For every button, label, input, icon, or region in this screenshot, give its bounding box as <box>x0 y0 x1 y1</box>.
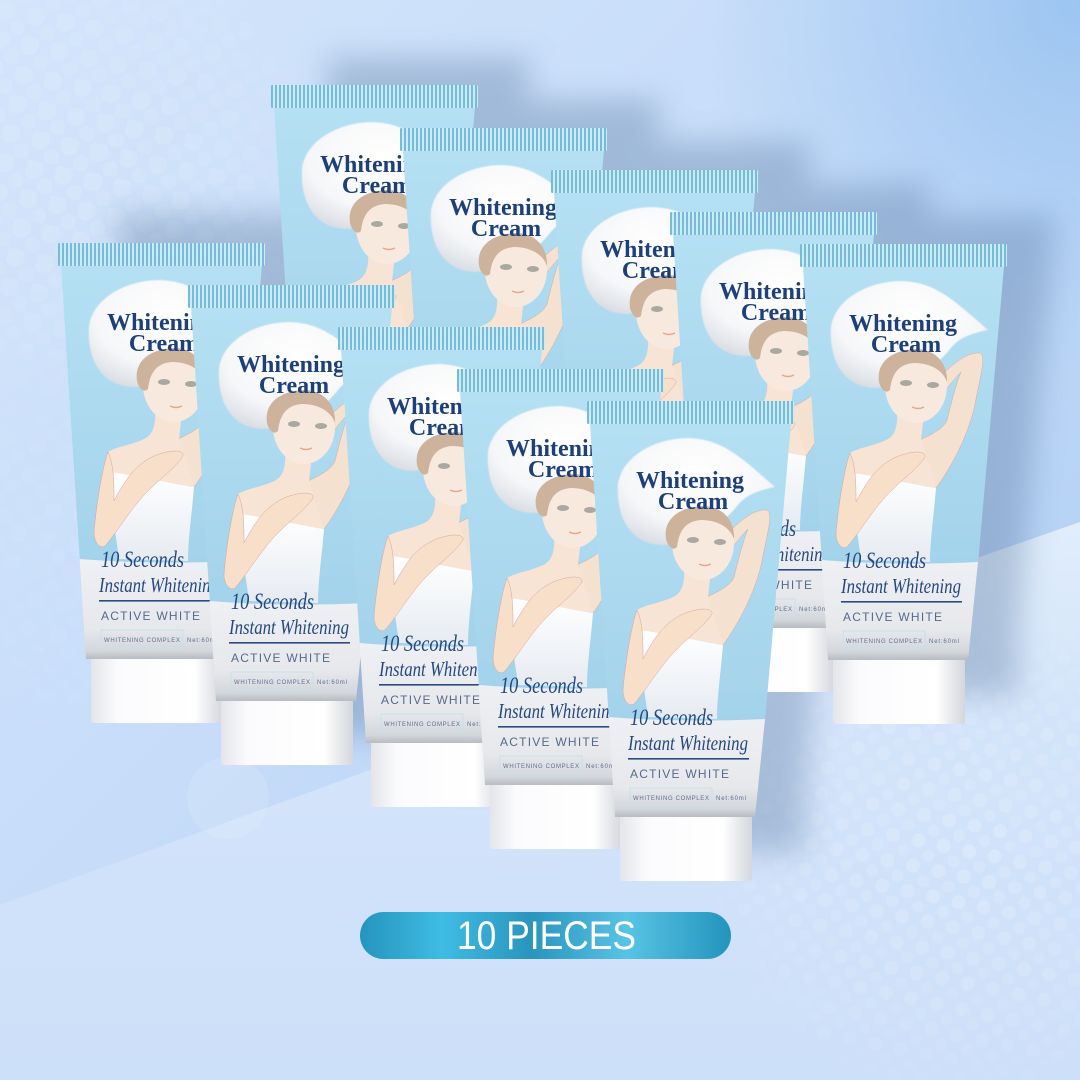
tube 1: Instant Whitening <box>311 415 432 439</box>
tube 10 (front): ACTIVE WHITE <box>630 767 729 781</box>
tube 3: 10 Seconds <box>594 474 677 499</box>
tube 1: Whitening <box>320 152 428 178</box>
tube 4: ACTIVE WHITE <box>713 578 812 592</box>
tube 3 <box>551 170 758 650</box>
tube 10 (front): Cream <box>658 489 728 515</box>
tube 9: Instant Whitening <box>497 699 618 723</box>
tube 6: Whitening <box>107 310 215 336</box>
tube 5 <box>800 244 1007 724</box>
tube 10 (front): Whitening <box>636 468 744 494</box>
tube 8: Net:60ml <box>467 722 497 728</box>
tube 7: ACTIVE WHITE <box>231 651 330 665</box>
tube 3: Net:60ml <box>680 565 710 571</box>
tube 1: Cream <box>342 173 412 199</box>
tube 6: 10 Seconds <box>101 547 184 572</box>
tube 10 (front): Net:60ml <box>716 796 746 802</box>
tube 3: Instant Whitening <box>591 500 712 524</box>
tube 5: WHITENING COMPLEX <box>846 639 922 645</box>
tube 4: Net:60ml <box>799 607 829 613</box>
tube 7: Instant Whitening <box>228 615 349 639</box>
tube 5: Cream <box>871 332 941 358</box>
tube 6: Cream <box>129 331 199 357</box>
tube 8: Whitening <box>387 394 495 420</box>
tube 3: Cream <box>622 258 692 284</box>
tube 10 (front): 10 Seconds <box>630 705 713 730</box>
tube 2: ACTIVE WHITE <box>443 494 542 508</box>
tube shadows <box>115 58 1057 852</box>
tube 5: Net:60ml <box>929 639 959 645</box>
tube 6: WHITENING COMPLEX <box>104 638 180 644</box>
tube 8: ACTIVE WHITE <box>381 693 480 707</box>
tube 7: 10 Seconds <box>231 589 314 614</box>
tube 10 (front): Instant Whitening <box>627 731 748 755</box>
tube 4: WHITENING COMPLEX <box>716 607 792 613</box>
tube 2: Instant Whitening <box>440 458 561 482</box>
tube 3: WHITENING COMPLEX <box>597 565 673 571</box>
tube 7 <box>188 285 395 765</box>
tube 9: Whitening <box>506 436 614 462</box>
tube 8: Instant Whitening <box>378 657 499 681</box>
badge: 10 pieces <box>360 912 731 959</box>
tube 8: WHITENING COMPLEX <box>384 722 460 728</box>
tube 2: WHITENING COMPLEX <box>446 523 522 529</box>
tube 9: Cream <box>528 457 598 483</box>
tube 7: WHITENING COMPLEX <box>234 680 310 686</box>
tube 3: ACTIVE WHITE <box>594 536 693 550</box>
tube 1 <box>271 85 478 565</box>
tube 2: Cream <box>471 216 541 242</box>
tube 6: Instant Whitening <box>98 573 219 597</box>
tube 4: Whitening <box>719 279 827 305</box>
tube 1: ACTIVE WHITE <box>314 451 413 465</box>
tube 5: Instant Whitening <box>840 574 961 598</box>
tube 4: Instant Whitening <box>710 542 831 566</box>
tube 1: 10 Seconds <box>314 389 397 414</box>
tube 2 <box>400 128 607 608</box>
tube 9: WHITENING COMPLEX <box>503 764 579 770</box>
tube 3: Whitening <box>600 237 708 263</box>
tube 9: 10 Seconds <box>500 673 583 698</box>
tube 9: ACTIVE WHITE <box>500 735 599 749</box>
tube 5: ACTIVE WHITE <box>843 610 942 624</box>
tube 8: Cream <box>409 415 479 441</box>
tube 4 <box>670 212 877 692</box>
tube 6: Net:60ml <box>187 638 217 644</box>
tube 9 <box>457 369 664 849</box>
tube 8: 10 Seconds <box>381 631 464 656</box>
tube 1: Net:60ml <box>400 480 430 486</box>
tube 7: Whitening <box>237 352 345 378</box>
tube 1: WHITENING COMPLEX <box>317 480 393 486</box>
badge: 10 pieces: 10 PIECES <box>457 914 636 958</box>
tube 6 <box>58 243 265 723</box>
tube 9: Net:60ml <box>586 764 616 770</box>
tube 4: 10 Seconds <box>713 516 796 541</box>
tube 6: ACTIVE WHITE <box>101 609 200 623</box>
tube 2: Net:60ml <box>529 523 559 529</box>
tube 5: 10 Seconds <box>843 548 926 573</box>
tube 2: 10 Seconds <box>443 432 526 457</box>
tube 4: Cream <box>741 300 811 326</box>
tube 7: Cream <box>259 373 329 399</box>
tube 10 (front): WHITENING COMPLEX <box>633 796 709 802</box>
tube 7: Net:60ml <box>317 680 347 686</box>
tube 10 (front) <box>587 401 794 881</box>
tube 8 <box>338 327 545 807</box>
tube 5: Whitening <box>849 311 957 337</box>
tube 2: Whitening <box>449 195 557 221</box>
